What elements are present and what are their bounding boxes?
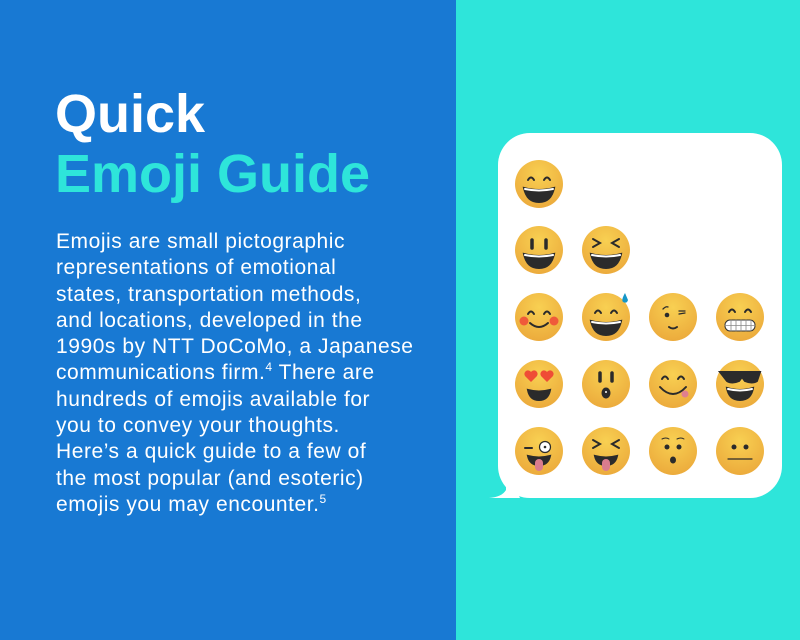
text block: description: communications firm.4 There are (56, 360, 375, 384)
text block: description: 1990s by NTT DoCoMo, a Japanese (56, 335, 414, 358)
emoji: grinning smiling eyes (515, 160, 563, 208)
text block: description: representations of emotional (56, 256, 336, 279)
text block: description: hundreds of emojis available for (56, 388, 370, 411)
chat bubble (489, 133, 782, 498)
emoji: yum (649, 360, 697, 408)
emoji: heart eyes (515, 360, 563, 408)
title: Emoji Guide: Emoji Guide (55, 144, 370, 204)
emoji: grinning (515, 226, 563, 274)
emoji: neutral (716, 427, 764, 475)
emoji: squinting laugh (582, 226, 630, 274)
emoji: surprised (582, 360, 630, 408)
title: Quick: Quick (55, 84, 205, 144)
emoji: zany tongue (515, 427, 563, 475)
emoji: sweat grin (582, 293, 630, 341)
emoji: grimace (716, 293, 764, 341)
emoji: squint tongue (582, 427, 630, 475)
text block: description: the most popular (and esoteric) (56, 467, 364, 490)
text block: description: and locations, developed in the (56, 309, 363, 332)
text block: description: you to convey your thoughts. (56, 414, 340, 437)
text block: description: states, transportation methods, (56, 283, 361, 306)
panel: left blue (0, 0, 456, 640)
emoji: blushing smile (515, 293, 563, 341)
text block: description: Here’s a quick guide to a few of (56, 440, 366, 463)
emoji: sunglasses (716, 360, 764, 408)
emoji: hushed (649, 427, 697, 475)
text block: description: Emojis are small pictographic (56, 230, 345, 253)
emoji: wink (649, 293, 697, 341)
text block: description (56, 230, 414, 516)
text block: description: emojis you may encounter.5 (56, 492, 327, 516)
